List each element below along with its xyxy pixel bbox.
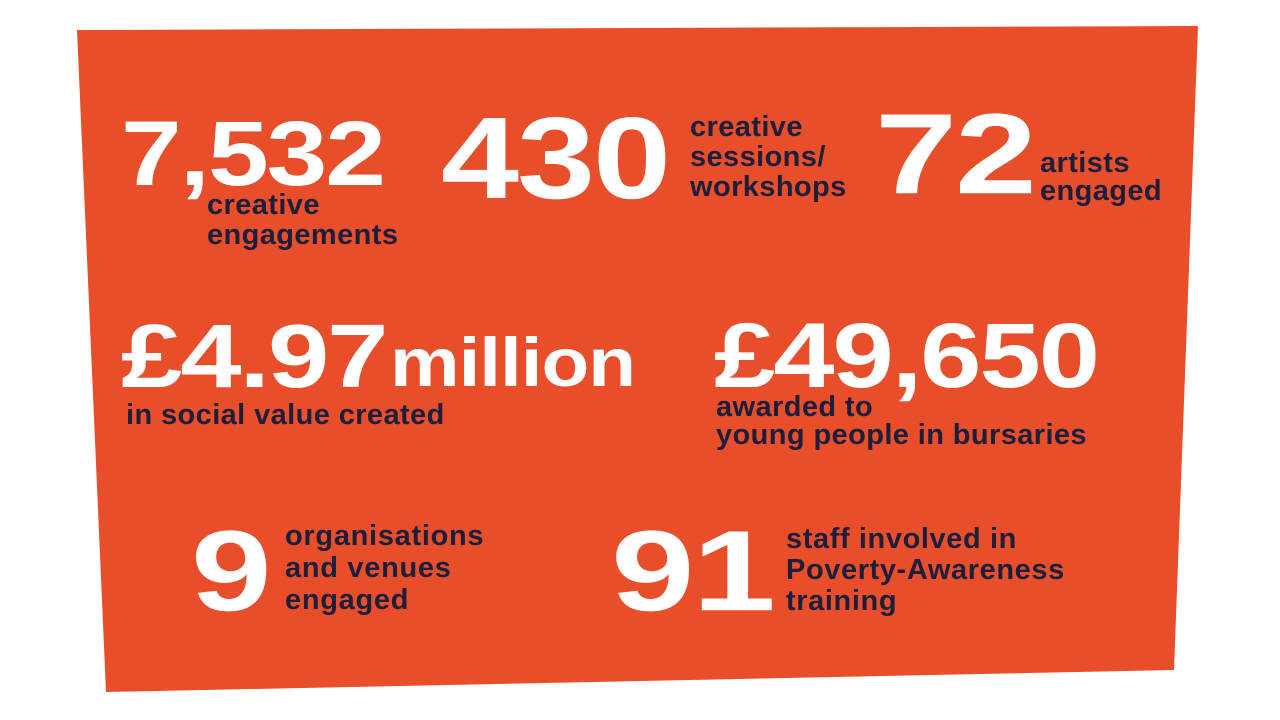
text: staff involved in bbox=[786, 523, 1017, 555]
text: 9 bbox=[191, 508, 269, 635]
text: workshops bbox=[690, 171, 847, 203]
stat: 430 creative sessions bbox=[441, 93, 847, 223]
stat: £49,650 bursaries bbox=[714, 304, 1098, 451]
text: million bbox=[390, 325, 635, 401]
stat: 91 staff trained bbox=[611, 508, 1065, 635]
text: training bbox=[786, 585, 897, 617]
text: 72 bbox=[875, 91, 1035, 218]
stat: 72 artists engaged bbox=[875, 91, 1162, 218]
text: organisations bbox=[285, 520, 484, 552]
text: sessions/ bbox=[690, 141, 826, 173]
stat: 7,532 creative engagements bbox=[121, 102, 398, 251]
text: creative bbox=[690, 111, 803, 143]
text: 430 bbox=[441, 93, 669, 223]
text: artists bbox=[1040, 147, 1130, 179]
stat: 9 organisations bbox=[191, 508, 484, 635]
text: and venues bbox=[285, 552, 452, 584]
text: engaged bbox=[285, 584, 409, 616]
text: Poverty-Awareness bbox=[786, 554, 1065, 586]
text: awarded to bbox=[716, 391, 873, 423]
text: creative bbox=[207, 189, 320, 221]
text: 91 bbox=[611, 508, 774, 635]
text: young people in bursaries bbox=[716, 419, 1087, 451]
text: in social value created bbox=[126, 399, 445, 431]
text: £49,650 bbox=[714, 304, 1098, 407]
text: engagements bbox=[207, 219, 398, 251]
text: £4.97 bbox=[121, 306, 386, 407]
text: 7,532 bbox=[121, 102, 384, 205]
text: engaged bbox=[1040, 175, 1162, 207]
stat: £4.97 million social value bbox=[121, 306, 635, 431]
